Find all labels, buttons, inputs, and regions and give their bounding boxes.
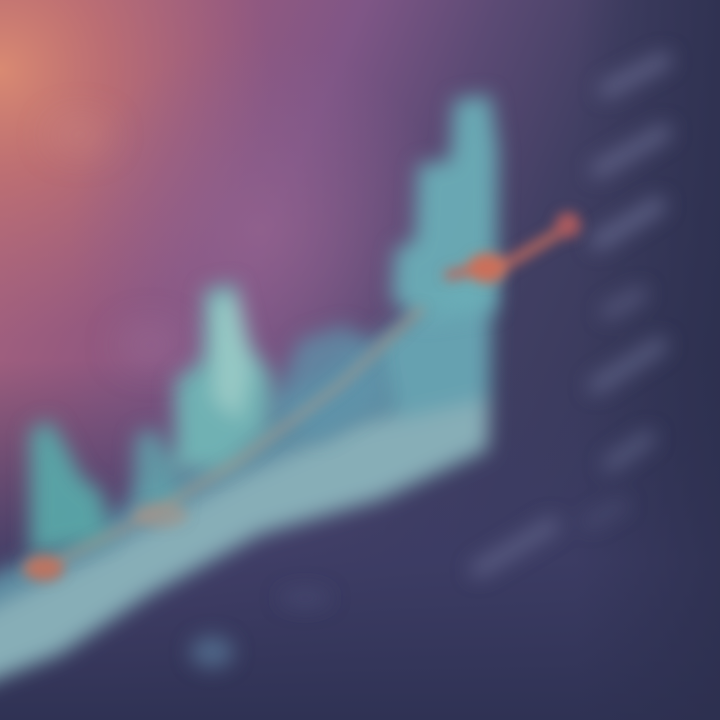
- peak: low shoulder: [268, 325, 380, 440]
- trend marker: centre-left: [132, 502, 188, 528]
- area chart base: [0, 270, 492, 690]
- highlight: middle peak: [213, 295, 252, 420]
- blurred right-hand labels: [478, 60, 664, 570]
- trend marker: left: [24, 555, 64, 581]
- peak: tall right: [392, 95, 498, 320]
- soft glow: upper left: [50, 119, 180, 365]
- peak: small left: [132, 428, 178, 515]
- chart peaks: [30, 95, 498, 555]
- trend marker: end: [555, 212, 581, 238]
- peak: far left: [30, 420, 108, 555]
- trend line: [24, 212, 581, 581]
- blurred bottom mark: [190, 588, 331, 668]
- peak: middle: [175, 283, 272, 470]
- trend marker: right: [467, 253, 507, 283]
